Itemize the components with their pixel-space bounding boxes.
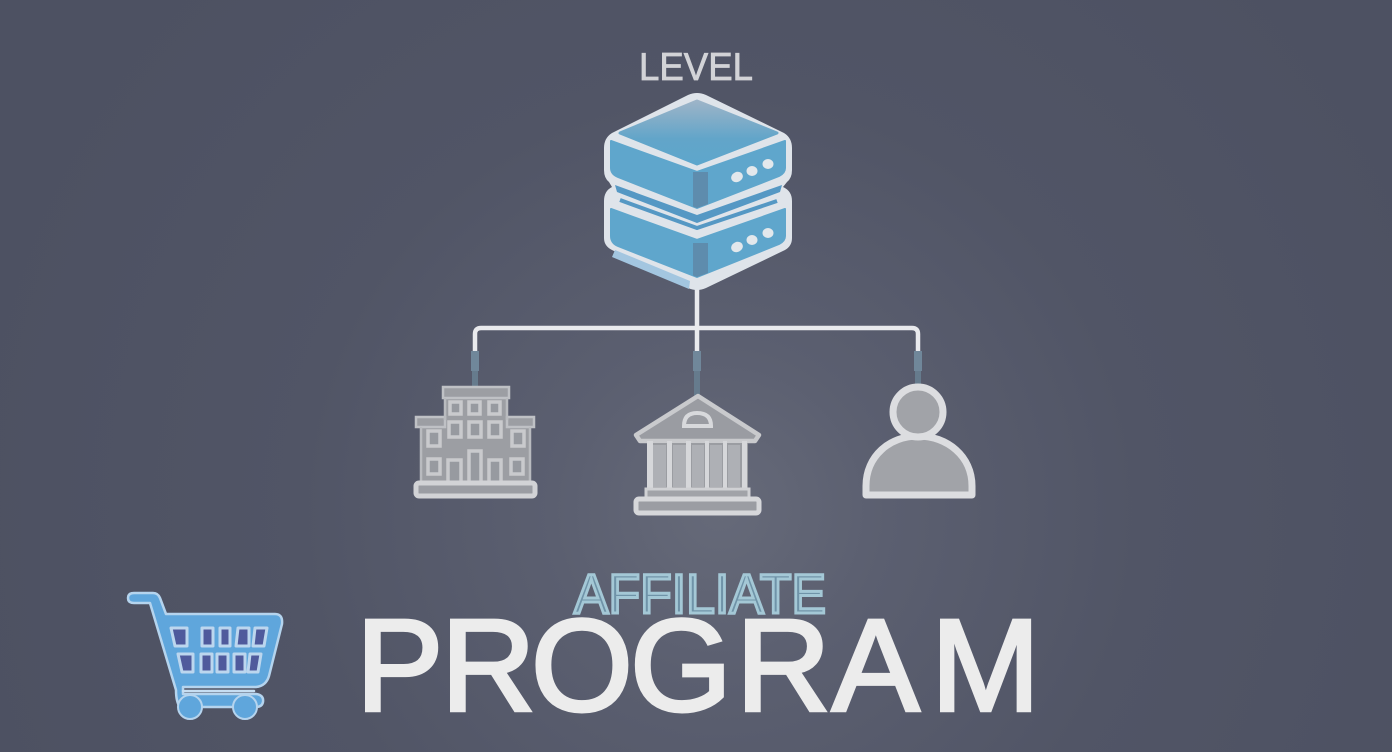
lower edge highlight [612, 250, 690, 289]
cart wheels [178, 695, 257, 719]
heading: AFFILIATE: AFFILIATE [574, 562, 826, 625]
connector tree [475, 284, 918, 396]
lower server block [611, 209, 785, 277]
heading: LEVEL: LEVEL [639, 46, 753, 89]
icon: shopping cart [128, 593, 282, 719]
cart grid [171, 628, 267, 672]
upper server block [611, 101, 785, 208]
cart frame [128, 593, 282, 707]
band between servers [615, 185, 782, 228]
server silhouette [604, 93, 792, 290]
icon: bank [636, 396, 759, 513]
icon: office building [416, 387, 535, 496]
icon: person [866, 387, 972, 495]
icon: server stack [604, 93, 792, 290]
heading: PROGRAM: PROGRAM [356, 592, 1040, 738]
